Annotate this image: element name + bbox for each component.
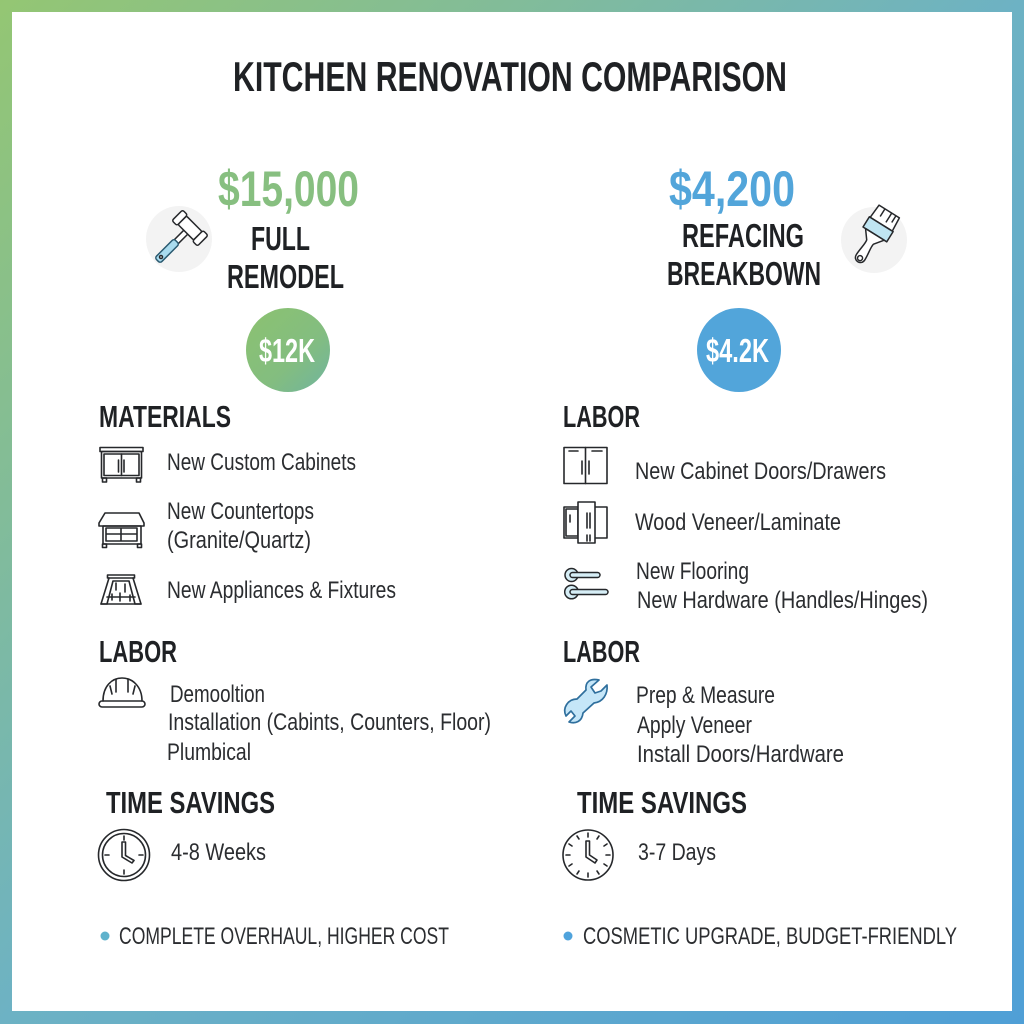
text: duration: 4-8 Weeks (171, 839, 266, 866)
text: flooring and hardware: New Hardware (Handles/Hinges) (637, 587, 928, 614)
time savings heading: TIME SAVINGS (577, 785, 747, 820)
labor heading: LABOR (563, 399, 640, 434)
icon: cabinet doors (564, 448, 607, 484)
text: labor steps: Prep & Measure (636, 682, 775, 709)
icon: countertop (99, 513, 144, 548)
panel: refacing (563, 161, 957, 950)
text: flooring and hardware (636, 558, 928, 614)
full remodel price: $15,000 (218, 161, 359, 217)
badge: $4.2K (697, 308, 781, 392)
text: labor items: Demooltion (170, 681, 265, 708)
refacing price: $4,200 (669, 161, 795, 217)
full remodel heading (227, 220, 344, 295)
text: new countertops (167, 498, 314, 554)
text: labor steps (636, 682, 844, 768)
text: new countertops: New Countertops (167, 498, 314, 525)
text: labor steps: Apply Veneer (637, 712, 752, 739)
materials heading: MATERIALS (99, 399, 231, 434)
icon: paint brush (841, 204, 907, 273)
text: labor steps: Install Doors/Hardware (637, 741, 844, 768)
text: labor items: Plumbical (167, 739, 251, 766)
labor heading: LABOR (99, 634, 177, 669)
panel: full remodel (98, 161, 491, 950)
text: duration: 3-7 Days (638, 839, 716, 866)
text: flooring and hardware: New Flooring (636, 558, 749, 585)
icon: veneer panels (564, 502, 607, 543)
refacing heading: REFACING (682, 217, 804, 254)
icon: hammer (145, 206, 212, 273)
summary: full remodel: COMPLETE OVERHAUL, HIGHER COST (119, 923, 449, 950)
badge: $12K (246, 308, 330, 392)
text: new custom cabinets: New Custom Cabinets (167, 449, 356, 476)
refacing heading (667, 217, 821, 292)
text: veneer: Wood Veneer/Laminate (635, 509, 841, 536)
icon: hard hat (99, 678, 145, 707)
full remodel heading: REMODEL (227, 258, 344, 295)
text: cabinet doors: New Cabinet Doors/Drawers (635, 458, 886, 485)
icon: cabinet (100, 448, 143, 482)
text: labor items (167, 681, 491, 766)
badge: $4.2K: $4.2K (706, 332, 769, 369)
full remodel heading: FULL (251, 220, 310, 257)
icon: wrench (565, 679, 607, 723)
badge: $12K: $12K (259, 332, 315, 369)
text: labor items: Installation (Cabints, Counters, Floor) (168, 709, 491, 736)
icon: appliance stand (101, 575, 141, 604)
labor heading: LABOR (563, 634, 640, 669)
time savings heading: TIME SAVINGS (106, 785, 275, 820)
title: KITCHEN RENOVATION COMPARISON (233, 53, 787, 100)
text: new appliances: New Appliances & Fixtures (167, 577, 396, 604)
refacing heading: BREAKBOWN (667, 255, 821, 292)
text: new countertops: (Granite/Quartz) (167, 527, 311, 554)
icon: clock (563, 830, 613, 880)
icon: handles (565, 568, 608, 599)
icon: clock (98, 830, 150, 880)
